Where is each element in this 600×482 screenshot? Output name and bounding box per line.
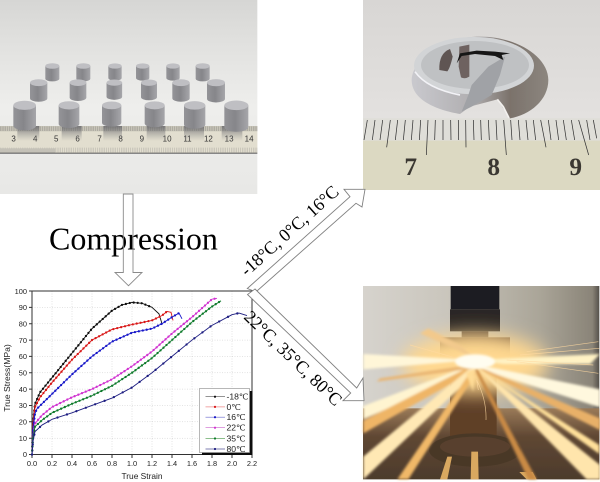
x tick labels: 0.0	[27, 459, 37, 468]
ruler: 5	[54, 134, 59, 143]
ruler: 10	[163, 134, 172, 143]
curve: -18C	[32, 302, 162, 454]
curve: 22C	[32, 298, 217, 454]
y tick labels: 80	[19, 320, 27, 328]
plot grid	[32, 291, 252, 454]
legend: 35℃	[226, 433, 246, 443]
x tick labels: 1.6	[187, 459, 197, 468]
y tick labels: 30	[19, 401, 27, 410]
curve: 0C	[32, 311, 173, 454]
x tick labels: 0.2	[47, 459, 57, 468]
legend: 22℃	[226, 423, 246, 433]
y tick labels: 100	[15, 287, 27, 296]
ruler: 4	[33, 134, 38, 143]
photo: fractured specimen on ruler	[363, 0, 600, 190]
fine sparks	[410, 342, 599, 420]
x tick labels: 1.8	[207, 459, 217, 468]
x tick labels: 0.8	[107, 459, 117, 468]
label: high temperatures: 22°C, 35°C, 80°C	[240, 306, 346, 410]
x tick labels	[27, 459, 257, 468]
curve: 35C	[32, 301, 221, 454]
legend: 80℃	[226, 444, 246, 454]
glow	[402, 333, 548, 393]
x tick labels: 1.0	[127, 459, 137, 468]
ruler: 13	[225, 134, 234, 143]
fractured disk	[412, 37, 548, 118]
ruler: 6	[75, 134, 80, 143]
y tick labels: 60	[19, 352, 27, 361]
x tick labels: 2.2	[247, 459, 257, 468]
ruler: 14	[245, 134, 254, 143]
arrow: down-right to sparks photo	[248, 289, 364, 401]
y tick labels: 10	[19, 434, 27, 443]
legend	[200, 388, 252, 455]
curve: 16C	[32, 313, 182, 454]
ruler: 8	[118, 134, 123, 143]
legend: 0℃	[226, 402, 241, 412]
ruler: 8	[487, 153, 500, 181]
photo: compression cylinder specimens on ruler	[0, 0, 257, 194]
y axis title: True Stress(MPa)	[2, 344, 12, 412]
arrow: up-right to fractured specimen	[247, 189, 365, 292]
ruler: 11	[183, 134, 192, 143]
axes and ticks	[29, 291, 252, 458]
cylinder reflections	[17, 126, 242, 141]
data curves	[32, 298, 247, 454]
ruler: 12	[204, 134, 213, 143]
cylinders	[13, 63, 248, 132]
legend: 16℃	[226, 412, 246, 422]
stress-strain chart	[2, 287, 257, 481]
y tick labels	[15, 287, 27, 459]
x tick labels: 0.4	[67, 459, 77, 468]
ruler: 7	[404, 153, 417, 181]
sparks	[363, 328, 600, 479]
ruler: 9	[569, 153, 582, 181]
photo: high temperature compression with sparks	[363, 286, 600, 479]
ruler	[363, 118, 600, 190]
ruler: 9	[140, 134, 145, 143]
y tick labels: 20	[19, 418, 27, 426]
y tick labels: 50	[19, 368, 27, 378]
curve: 80C	[32, 313, 247, 454]
heading: Compression: Compression	[49, 220, 218, 256]
y tick labels: 90	[19, 303, 27, 312]
ruler: 7	[97, 134, 102, 143]
y tick labels: 70	[19, 336, 27, 345]
legend: -18℃	[226, 392, 249, 402]
x tick labels: 2.0	[227, 459, 237, 468]
x tick labels: 0.6	[87, 459, 97, 468]
x tick labels: 1.4	[167, 459, 177, 468]
y tick labels: 40	[19, 385, 27, 394]
x axis title: True Strain	[121, 471, 163, 481]
x tick labels: 1.2	[147, 459, 157, 468]
label: low temperatures: -18°C, 0°C, 16°C	[236, 181, 343, 280]
press column and die	[429, 286, 537, 479]
arrow: down from specimens to chart	[115, 194, 142, 286]
y tick labels: 0	[23, 450, 27, 459]
ruler: 3	[11, 134, 16, 143]
ruler	[0, 126, 257, 154]
